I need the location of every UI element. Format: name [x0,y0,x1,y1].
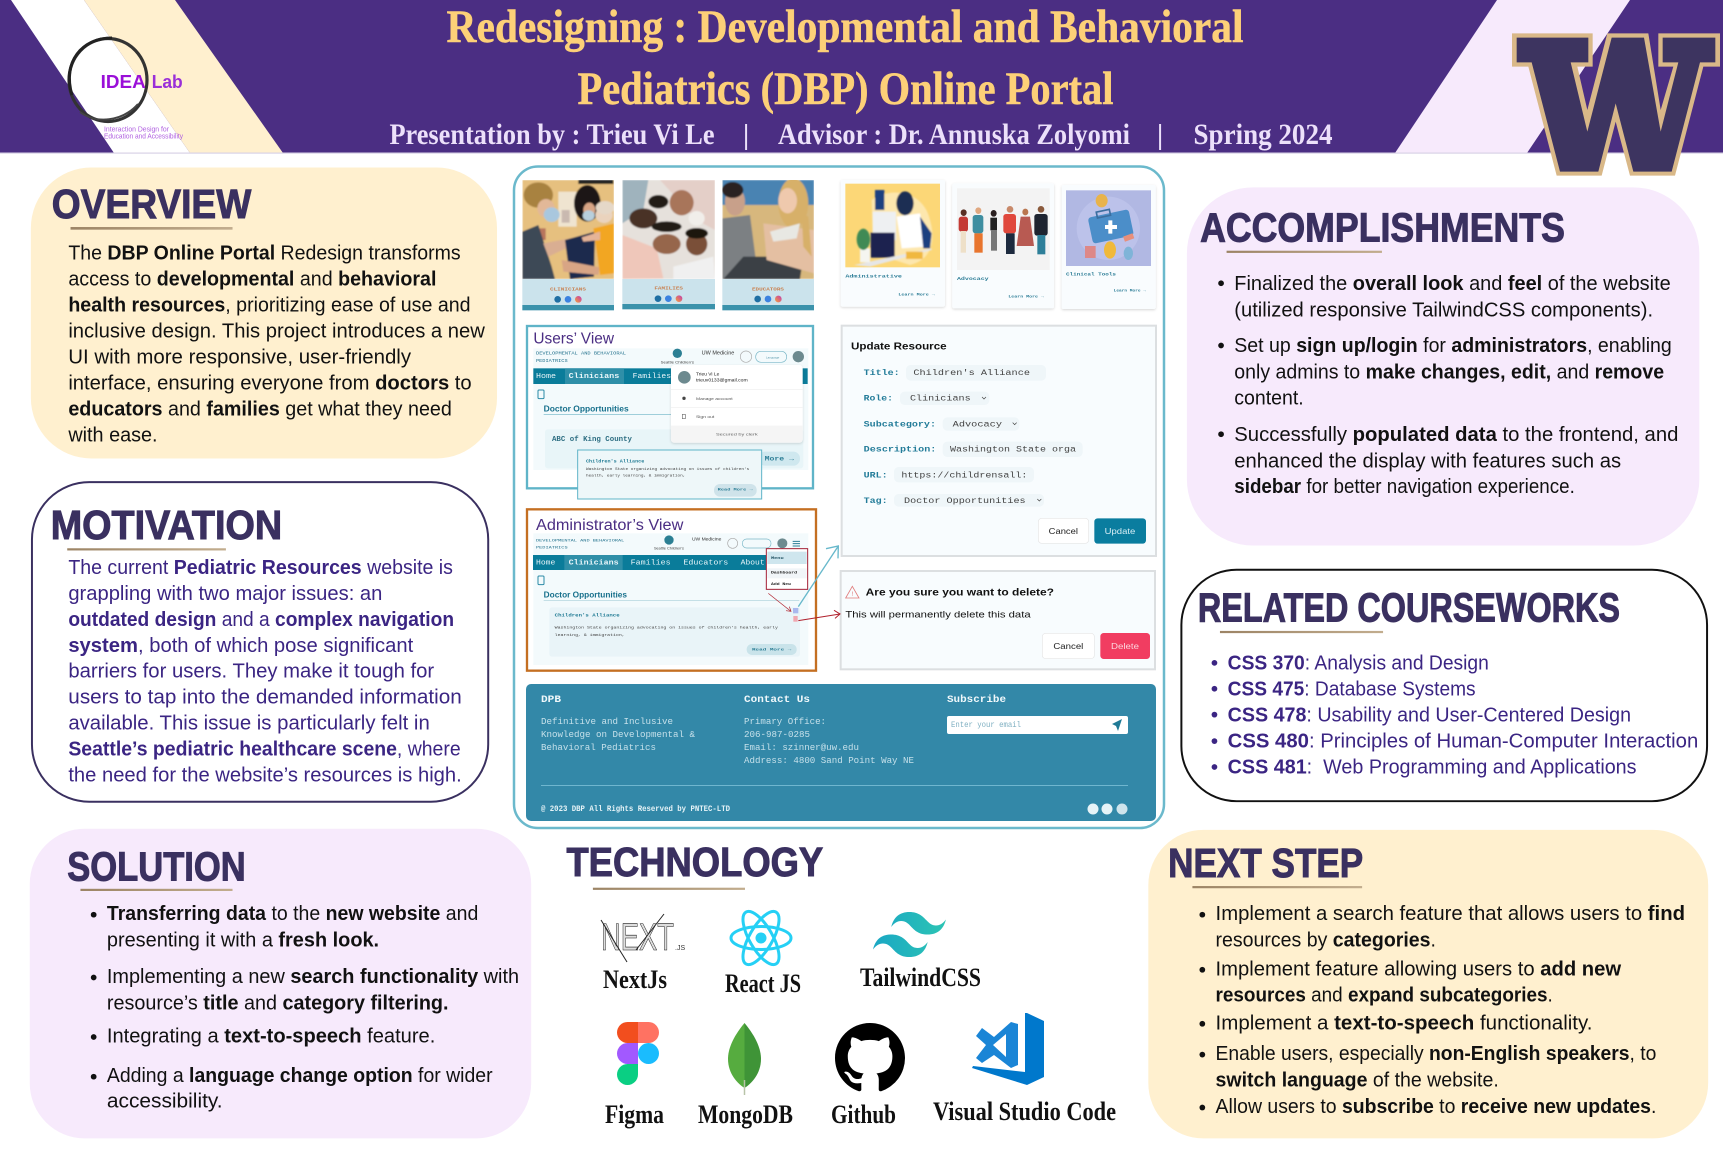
admin menu: Menu [771,557,784,561]
subtitle: Spring 2024 [1194,119,1333,151]
logo: IDEA Lab: Interaction Design for [104,125,169,134]
card: administrative: Learn More → [898,294,936,298]
logo: IDEA Lab: Education and Accessibility [104,132,183,140]
card: advocacy: Advocacy [957,276,989,282]
motivation text: users to tap into the demanded information [68,687,462,709]
footer screenshot: Email: szinner@uw.edu [744,742,859,753]
next step bullets: Enable users, especially non-English speakers, to [1216,1043,1656,1065]
modal: update resource: Title: [864,368,900,378]
label: MongoDB: MongoDB [698,1100,793,1129]
card: clinical tools: Clinical Tools [1066,271,1116,277]
resource card overlay: Children's Alliance [586,460,645,465]
heading: accomplishments: ACCOMPLISHMENTS [1200,204,1565,250]
accomplishments bullets: only admins to make changes, edit, and remove [1234,362,1664,384]
screenshot: administrator's view: Clinicians [569,560,619,568]
modal: update resource: Description: [864,445,936,455]
next step bullets: resources and expand subcategories. [1216,985,1553,1007]
modal: update resource: Role: [864,394,893,404]
card: families: FAMILIES [654,286,683,292]
card: clinicians [522,180,614,310]
courseworks list: CSS 478: Usability and User-Centered Design [1228,704,1631,726]
card: clinical tools [1062,185,1156,309]
screenshot: administrator's view: Home [536,560,555,568]
modal: update resource: Subcategory: [864,419,936,429]
courseworks list: CSS 480: Principles of Human-Computer Interaction [1228,731,1698,753]
footer screenshot: Enter your email [951,721,1021,730]
arrow: delete to confirm modal [798,610,840,621]
screenshot: users' view: Home [536,373,556,381]
motivation text: barriers for users. They make it tough for [68,661,434,683]
overview text: with ease. [67,425,158,447]
modal: update resource: Advocacy [953,419,1002,429]
footer screenshot: 206-987-0285 [744,729,810,740]
screenshot: administrator's view [527,509,840,671]
screenshot: administrator's view: Administrator’s View [536,517,684,534]
screenshot: users' view: Users’ View [533,330,615,347]
screenshot: users' view: ABC of King County [552,436,633,444]
modal: update resource: URL: [864,470,888,480]
admin menu [766,549,808,589]
heading: solution: SOLUTION [67,844,246,890]
modal: update resource: Update [1105,526,1136,536]
overview text: UI with more responsive, user-friendly [68,347,412,369]
courseworks list [1212,652,1698,779]
solution bullets: resource’s title and category filtering. [107,992,449,1014]
motivation text: grappling with two major issues: an [68,583,382,605]
screenshot: administrator's view: Doctor Opportunities [544,590,628,599]
icon: MongoDB [728,1023,761,1095]
card: advocacy [952,183,1054,308]
motivation text: Seattle’s pediatric healthcare scene, where [68,738,461,760]
user dropdown: trieuv0133@gmail.com [696,378,748,383]
user dropdown: Trieu Vi Le [696,372,720,377]
footer screenshot: DPB [541,695,561,706]
logo: IDEA Lab: IDEA [101,72,146,92]
overview text: access to developmental and behavioral [68,269,436,291]
screenshot: users' view [527,326,813,499]
panel: website screenshots [514,166,1164,828]
footer screenshot: Subscribe [947,694,1006,706]
icon: TailwindCSS [873,912,946,957]
solution bullets: accessibility. [107,1091,223,1113]
footer screenshot: Address: 4800 Sand Point Way NE [744,755,914,766]
accomplishments bullets: Successfully populated data to the frontend, and [1234,424,1678,446]
screenshot: users' view: Families [633,373,671,381]
accomplishments bullets: enhanced the display with features such as [1234,450,1621,472]
solution bullets: Adding a language change option for wider [107,1065,493,1087]
modal: update resource: Clinicians [910,394,971,404]
arrow: menu to edit [768,593,791,611]
modal: update resource [842,326,1156,556]
title [446,1,1244,115]
modal: delete confirmation: Are you sure you want to delete? [866,588,1054,599]
screenshot: administrator's view: DEVELOPMENTAL AND BEHAVIORAL [536,539,625,543]
card: clinicians: CLINICIANS [550,287,586,293]
screenshot: administrator's view: Washington State organizing advocating on issues of children's health, early [555,626,779,631]
label: Github: Github [831,1100,896,1129]
screenshot: users' view: Language [766,355,780,359]
overview text: educators and families get what they need [68,399,452,421]
overview text: The DBP Online Portal Redesign transforms [68,243,461,265]
modal: update resource: Doctor Opportunities [904,496,1026,506]
technology logos [601,906,1116,1129]
screenshot: administrator's view: UW Medicine [692,536,722,541]
accomplishments bullets: Finalized the overall look and feel of the website [1234,273,1671,295]
resource card overlay [578,450,762,499]
screenshot: administrator's view: PEDIATRICS [536,546,568,550]
subtitle: Presentation by : Trieu Vi Le [390,119,714,151]
accomplishments bullets [1218,273,1678,498]
accomplishments bullets: sidebar for better navigation experience. [1234,476,1575,498]
subtitle: | [743,120,749,151]
screenshot: users' view: UW Medicine [702,350,734,356]
modal: delete confirmation: Cancel [1053,641,1083,651]
panel: solution [30,829,531,1138]
card: families [622,180,715,309]
screenshot: users' view: Clinicians [569,373,619,381]
footer screenshot [526,684,1156,821]
motivation text: The current Pediatric Resources website is [68,557,453,579]
screenshot: administrator's view: Read More → [752,648,792,653]
overview text: interface, ensuring everyone from doctors to [68,373,472,395]
footer screenshot: Contact Us [744,695,810,706]
screenshot: users' view: DEVELOPMENTAL AND BEHAVIORAL [536,352,626,357]
photo cards [522,178,814,499]
courseworks list: CSS 370: Analysis and Design [1228,652,1489,674]
resource card overlay: health, early learning, & immigration, [586,473,685,478]
heading: motivation: MOTIVATION [51,502,282,548]
next step bullets [1199,903,1685,1118]
screenshot: administrator's view: Educators [683,560,728,568]
next step bullets: switch language of the website. [1216,1070,1499,1092]
card: administrative [841,180,945,307]
panel: related courseworks [1181,570,1707,801]
icon: Github [835,1023,905,1091]
solution bullets: Implementing a new search functionality with [107,966,519,988]
icon: Visual Studio Code [972,1013,1044,1085]
next step bullets: Implement feature allowing users to add new [1216,958,1621,980]
screenshot: administrator's view: learning, & immigration, [555,633,625,638]
resource card overlay: Washington State organizing advocating on issues of children's [586,467,750,472]
label: TailwindCSS: TailwindCSS [860,963,981,992]
modal: update resource: Cancel [1049,526,1078,536]
modal: delete confirmation: This will permanently delete this data [845,609,1032,619]
icon: Figma [617,1022,659,1085]
admin menu: Dashboard [771,571,797,576]
motivation text: outdated design and a complex navigation [68,609,454,631]
motivation text [68,557,462,786]
label: Figma: Figma [605,1100,664,1129]
icon: Next.js: NEXT [601,917,674,959]
arrow: edit to update modal [798,546,838,607]
solution bullets [91,903,519,1113]
logo: IDEA Lab: Lab [152,72,183,92]
next step bullets: Allow users to subscribe to receive new updates. [1216,1096,1656,1118]
overview text: health resources, prioritizing ease of use and [68,295,471,317]
panel: accomplishments [1187,187,1699,546]
accomplishments bullets: (utilized responsive TailwindCSS components). [1234,299,1653,321]
motivation text: the need for the website’s resources is high. [68,764,462,786]
modal: update resource: Children's Alliance [913,368,1030,378]
screenshot: users' view: PEDIATRICS [536,359,568,364]
motivation text: system, both of which pose significant [68,635,414,657]
screenshot: administrator's view: Families [631,560,671,568]
panel: motivation [32,482,488,802]
user dropdown: Sign out [696,414,715,419]
modal: update resource: https://childrensall: [901,470,1027,480]
footer screenshot: Definitive and Inclusive [541,716,673,727]
icons: edit and delete [793,608,798,622]
label: Visual Studio Code: Visual Studio Code [933,1097,1116,1126]
user dropdown [671,365,803,443]
logo: IDEA Lab [69,38,183,140]
subtitle: | [1157,120,1163,151]
overview text [67,243,485,447]
overview text: inclusive design. This project introduces a new [68,321,485,343]
label: NextJs: NextJs [603,965,667,994]
footer screenshot: Behavioral Pediatrics [541,742,656,753]
screenshot: users' view: Doctor Opportunities [544,404,629,414]
card: educators: EDUCATORS [752,286,784,292]
modal: update resource: Update Resource [851,341,947,352]
modals [841,326,1156,669]
accomplishments bullets: content. [1234,387,1304,409]
label: React JS: React JS [725,969,801,998]
screenshot: administrator's view: About [741,560,765,568]
footer screenshot: @ 2023 DBP All Rights Reserved by PNTEC-LTD [541,805,730,814]
screenshot: administrator's view: Children's Alliance [555,613,620,618]
screenshot: users' view: Seattle Children's [661,359,694,364]
courseworks list: CSS 475: Database Systems [1228,678,1476,700]
motivation text: available. This issue is particularly felt in [68,713,430,735]
card: educators [722,178,814,310]
footer screenshot: Primary Office: [744,716,826,727]
modal: update resource: Tag: [864,496,888,506]
title: Redesigning : Developmental and Behavioral [446,1,1244,53]
accomplishments bullets: Set up sign up/login for administrators, enabling [1234,335,1672,357]
top right resource cards [841,180,1156,309]
header banner [0,0,1723,154]
card: administrative: Administrative [845,274,902,280]
subtitle [390,119,1333,151]
icon: React [731,906,791,970]
user dropdown: Manage account [696,396,734,401]
heading: related courseworks: RELATED COURSEWORKS [1198,585,1620,631]
card: clinical tools: Learn More → [1114,289,1147,293]
screenshot: users' view: More → [765,455,795,462]
modal: delete confirmation: Delete [1111,641,1139,651]
next step bullets: Implement a search feature that allows users to find [1216,903,1685,925]
card: advocacy: Learn More → [1008,295,1045,299]
next step bullets: Implement a text-to-speech functionality. [1216,1012,1592,1034]
user dropdown: Secured by clerk [716,431,758,436]
solution bullets: Transferring data to the new website and [107,903,478,925]
courseworks list: CSS 481: Web Programming and Applications [1228,757,1637,779]
resource card overlay: Read More → [718,488,753,493]
heading: next step: NEXT STEP [1168,840,1363,886]
title: Pediatrics (DBP) Online Portal [578,63,1114,115]
panel: next step [1148,830,1708,1138]
subtitle: Advisor : Dr. Annuska Zolyomi [778,119,1130,151]
modal: delete confirmation [841,571,1155,669]
next step bullets: resources by categories. [1216,930,1436,952]
modal: update resource: Washington State orga [950,445,1076,455]
heading: technology: TECHNOLOGY [566,839,823,885]
solution bullets: presenting it with a fresh look. [107,930,379,952]
footer screenshot: Knowledge on Developmental & [541,729,695,740]
modal: delete confirmation: ! [851,591,853,598]
solution bullets: Integrating a text-to-speech feature. [107,1026,435,1048]
logo: UW W [1512,33,1720,176]
screenshot: administrator's view: Seattle Children's [654,546,684,550]
heading: overview: OVERVIEW [52,181,252,227]
admin menu: Add New [771,582,792,587]
panel: overview [31,168,497,458]
icon: Next.js: .JS [675,945,685,952]
